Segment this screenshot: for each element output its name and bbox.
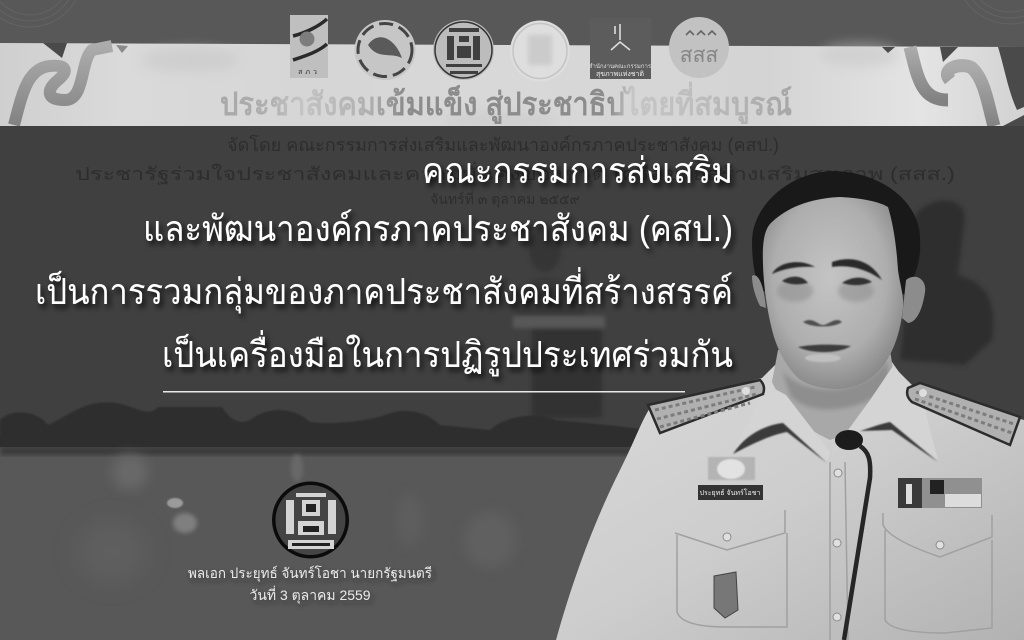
faint event text: จัดโดย คณะกรรมการส่งเสริมและพัฒนาองค์กรภาคประชาสังคม (คสป.)	[227, 134, 779, 155]
top strip arcs	[0, 0, 1024, 27]
logo: seal 2	[354, 20, 416, 80]
eyes	[782, 277, 872, 285]
banner title: ประชาสังคมเข้มแข็ง สู่ประชาธิปไตยที่สมบูรณ์	[220, 81, 792, 125]
pin badge	[714, 572, 738, 618]
logo: seal 4	[510, 20, 570, 82]
dark panel	[0, 126, 1024, 447]
logo: TPF: สภว	[298, 69, 320, 76]
right ribbon	[882, 47, 1024, 126]
crowd silhouettes	[0, 402, 650, 447]
speaker portrait	[556, 171, 1024, 640]
left epaulette	[648, 380, 764, 433]
main heading text: คณะกรรมการส่งเสริม	[422, 150, 733, 191]
collar	[733, 366, 938, 462]
logo: health commission: สุขภาพแห่งชาติ	[596, 70, 644, 78]
signature text: พลเอก ประยุทธ์ จันทร์โอชา นายกรัฐมนตรี	[188, 565, 432, 582]
divider rule	[163, 391, 685, 392]
lower lip highlight	[805, 354, 841, 362]
logo: seal 3	[433, 20, 494, 80]
hair	[752, 171, 920, 296]
faint event text: จันทร์ที่ ๓ ตุลาคม ๒๕๕๙	[430, 190, 580, 208]
ears	[752, 275, 925, 323]
nose	[803, 320, 842, 326]
collar shadow	[733, 422, 938, 463]
shadow beneath dark panel	[0, 447, 1024, 455]
pockets	[675, 462, 992, 640]
face	[763, 197, 903, 389]
signature text: วันที่ 3 ตุลาคม 2559	[250, 586, 371, 604]
signature text	[188, 565, 432, 604]
logo: health commission: สำนักงานคณะกรรมการ	[589, 63, 652, 70]
main heading text	[35, 150, 733, 377]
shirt	[556, 362, 1024, 640]
medal ribbons	[898, 478, 982, 508]
eye bags	[777, 280, 874, 302]
right epaulette	[907, 383, 1020, 445]
microphone	[835, 430, 870, 640]
logo: thaihealth	[669, 17, 729, 78]
government seal	[272, 482, 349, 558]
podium silhouette	[513, 228, 605, 418]
banner	[0, 43, 1024, 128]
clouds	[140, 43, 900, 128]
name plate: ประยุทธ์ จันทร์โอชา	[700, 488, 760, 497]
bottom background haze	[78, 454, 516, 582]
neck	[772, 350, 895, 440]
badge above name plate	[708, 457, 755, 480]
logo: health commission	[589, 18, 652, 79]
main heading text: เป็นเครื่องมือในการปฏิรูปประเทศร่วมกัน	[162, 330, 733, 377]
left ribbon	[14, 43, 128, 125]
neck shadow	[782, 360, 888, 409]
faint event text	[75, 134, 955, 208]
logo: thaihealth: สสส	[680, 44, 718, 67]
name plate	[698, 485, 763, 500]
main heading text: และพัฒนาองค์กรภาคประชาสังคม (คสป.)	[143, 208, 733, 249]
eyebrows	[772, 259, 882, 280]
shirt buttons	[723, 469, 944, 621]
camera silhouette behind speaker	[900, 200, 993, 365]
logo: TPF	[290, 15, 328, 78]
logo row	[290, 15, 729, 82]
faint event text: ประชารัฐร่วมใจประชาสังคมและความมั่นคงของชาติ เครือข่ายสร้างเสริมสุขภาพ (สสส.)	[75, 161, 955, 185]
main heading text: เป็นการรวมกลุ่มของภาคประชาสังคมที่สร้างสรรค์	[35, 267, 733, 314]
mouth	[798, 345, 851, 352]
